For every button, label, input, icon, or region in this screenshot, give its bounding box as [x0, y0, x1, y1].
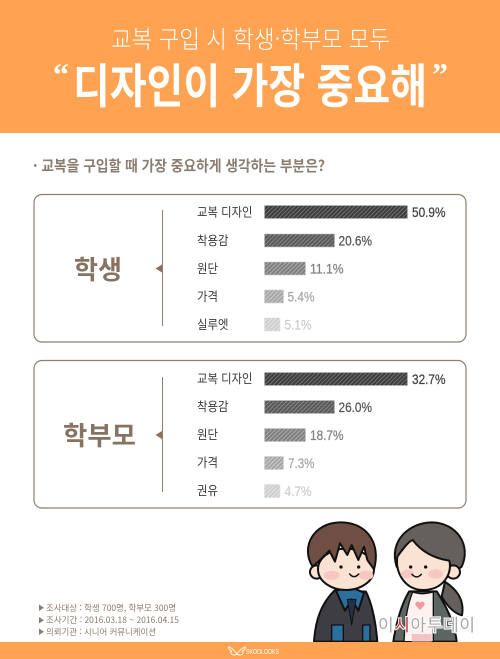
bracket line and pointer	[156, 377, 163, 492]
row: design	[197, 202, 446, 220]
row: fabric: 18.7%	[310, 428, 344, 443]
row: fabric	[197, 424, 344, 443]
panel: parents	[34, 360, 466, 508]
subtitle: 교복 구입 시 학생·학부모 모두	[111, 21, 390, 56]
opening quote: “	[53, 56, 69, 92]
bar chart: parents	[197, 368, 446, 499]
survey notes	[39, 602, 179, 638]
mother	[393, 522, 465, 642]
row: design	[197, 368, 446, 387]
heading: parents: 학부모	[63, 416, 136, 453]
closing quote: ”	[432, 56, 448, 92]
row: alternative	[197, 480, 312, 499]
row: price: 7.3%	[288, 456, 314, 471]
row: fit: 착용감	[197, 396, 229, 415]
row: fit: 착용감	[197, 230, 229, 249]
row: fit: 20.6%	[338, 234, 372, 248]
row: fabric	[197, 258, 344, 277]
logo: butterfly	[228, 647, 246, 655]
footer bar	[0, 642, 500, 659]
row: price: 가격	[197, 286, 218, 305]
title: 디자인이 가장 중요해	[73, 48, 427, 117]
panel: students	[34, 194, 466, 342]
boy face	[324, 565, 373, 580]
mother face and heart	[401, 565, 443, 610]
bar chart: students	[197, 202, 446, 333]
survey notes: 의뢰기관 : 시니어 커뮤니케이션	[46, 626, 156, 638]
row: design: 교복 디자인	[197, 202, 252, 220]
row: fit	[197, 230, 372, 249]
row: price: 5.4%	[288, 290, 314, 304]
watermark: 이시아투데이	[378, 611, 475, 636]
boy	[308, 522, 377, 642]
logo text: SKOOLOOKS	[246, 647, 279, 656]
row: fit: 26.0%	[338, 400, 372, 415]
row: alternative: 권유	[197, 480, 218, 499]
row: fabric: 원단	[197, 424, 218, 443]
row: alternative: 4.7%	[284, 484, 312, 499]
row: design: 32.7%	[412, 372, 446, 387]
row: price	[197, 452, 314, 471]
row: silhouette: 실루엣	[197, 314, 228, 333]
bracket line and pointer	[156, 210, 163, 326]
row: fabric: 원단	[197, 258, 218, 277]
row: design: 교복 디자인	[197, 368, 252, 387]
row: fabric: 11.1%	[310, 262, 344, 276]
row: silhouette: 5.1%	[284, 318, 312, 332]
survey notes: 조사대상 : 학생 700명, 학부모 300명	[46, 602, 176, 614]
survey question: · 교복을 구입할 때 가장 중요하게 생각하는 부분은?	[33, 155, 325, 176]
row: price: 가격	[197, 452, 218, 471]
row: price	[197, 286, 314, 305]
heading: students: 학생	[74, 250, 122, 287]
survey notes: 조사기간 : 2016.03.18 ~ 2016.04.15	[46, 614, 179, 626]
illustration: boy and mother	[308, 522, 465, 642]
row: silhouette	[197, 314, 312, 333]
header banner	[0, 0, 500, 133]
row: design: 50.9%	[412, 205, 446, 220]
row: fit	[197, 396, 372, 415]
